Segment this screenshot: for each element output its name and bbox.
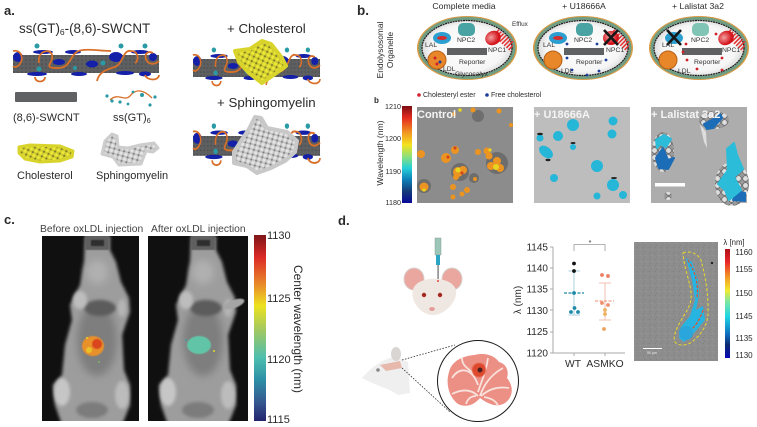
panel a: SWCNT molecular models [4, 3, 320, 182]
label: ss(GT)6: 6 [147, 116, 151, 125]
icon: mouse head with syringe [404, 238, 462, 315]
micrograph: control [417, 107, 513, 203]
organelle: complete media: LAL [425, 42, 437, 49]
colorbar: center wavelength 1115-1130: 1125 [267, 293, 291, 305]
nanotube with cholesterol [193, 41, 320, 86]
cerebellum inset [438, 340, 518, 422]
colorbar: wavelength 1180-1210 [375, 102, 412, 207]
row label: Endolysosomal Organelle [375, 21, 395, 78]
colorbar: lambda 1130-1160: 1155 [735, 265, 753, 274]
colorbar: lambda 1130-1160: 1150 [735, 289, 753, 298]
colorbar: wavelength 1180-1210: 1180 [386, 198, 401, 207]
nanotube with sphingomyelin [193, 117, 320, 173]
hotspot: after [185, 336, 215, 354]
heading: ss(GT)6-(8,6)-SWCNT: -(8,6)-SWCNT [65, 21, 150, 36]
nanotube with DNA wrap [13, 44, 159, 82]
organelle: U18666A [534, 17, 632, 79]
colorbar: wavelength 1180-1210: 1210 [385, 102, 401, 111]
colorbar: center wavelength 1115-1130: 1115 [267, 414, 290, 426]
colorbar: center wavelength 1115-1130: 1120 [267, 354, 291, 366]
axes [553, 247, 625, 353]
organelle: U18666A: NPC2 [574, 37, 592, 44]
organelle: complete media: Reporter [459, 59, 486, 66]
organelle: U18666A: LAL [543, 42, 555, 49]
icon: side view mouse [362, 347, 410, 395]
colorbar: lambda 1130-1160: 1145 [735, 312, 753, 321]
scale bar with label: 50 µm [647, 351, 657, 355]
x labels: WT [565, 359, 582, 370]
data: ASMKO [595, 273, 614, 331]
data: WT [564, 262, 584, 315]
colorbar: lambda 1130-1160: 1130 [735, 351, 753, 360]
colorbar: center wavelength 1115-1130 [254, 230, 305, 426]
organelle: complete media: Glycocalyx [455, 71, 488, 78]
y tick labels: 1130 [526, 306, 548, 317]
legend: cholesterol types: Free cholesterol [491, 92, 542, 99]
micrograph: U18666A [534, 107, 630, 203]
heading: before injection: Before oxLDL injection [40, 224, 143, 235]
panel label c: c. [4, 212, 15, 227]
panel label a: a. [4, 3, 15, 18]
organelle: Lalistat 3a2: LAL [662, 42, 674, 49]
organelle: complete media: NPC1 [488, 47, 506, 54]
row label: Endolysosomal Organelle: Organelle [385, 32, 395, 68]
y tick labels: 1145 [526, 242, 548, 254]
organelle: U18666A: Reporter [576, 59, 603, 66]
y tick labels: 1140 [526, 264, 548, 274]
micrograph: cerebellar lesion [634, 242, 718, 361]
scale bar [655, 183, 685, 186]
x labels [565, 359, 624, 370]
organelle: complete media [418, 17, 529, 79]
colorbar: lambda 1130-1160: 1160 [735, 248, 753, 257]
colorbar: lambda 1130-1160: λ [nm] [723, 238, 745, 247]
panel label b: b. [357, 3, 369, 18]
label: ss(GT)6: ss(GT) [113, 112, 147, 124]
heading: after injection: After oxLDL injection [151, 224, 246, 235]
y tick labels [526, 242, 548, 360]
organelle: Lalistat 3a2 [650, 17, 748, 79]
panel c: in vivo mouse imaging [4, 212, 305, 426]
label: + Lalistat 3a2: + Lalistat 3a2 [651, 109, 720, 121]
sub-label b: b [374, 96, 379, 105]
panel b: endolysosomal organelle schematics and micrographs [357, 1, 749, 207]
cholesterol model [19, 145, 73, 162]
organelle: Lalistat 3a2: NPC1 [722, 47, 740, 54]
organelle: complete media: NPC2 [457, 37, 475, 44]
zoom lines [402, 345, 455, 412]
y tick labels: 1120 [526, 348, 548, 360]
label: Control: Control [417, 109, 456, 121]
mouse image: before [42, 236, 139, 421]
colorbar: wavelength 1180-1210: 1200 [385, 134, 401, 143]
row label: Endolysosomal Organelle: Endolysosomal [375, 21, 385, 78]
heading: Complete media: Complete media [432, 1, 496, 11]
organelle: Lalistat 3a2: Reporter [694, 59, 721, 66]
bare nanotube model [15, 92, 77, 102]
label: (8,6)-SWCNT: (8,6)-SWCNT [13, 112, 80, 124]
chart: wavelength by genotype [513, 240, 625, 370]
ss(GT)6 strand model [105, 91, 157, 107]
colorbar: lambda 1130-1160: 1135 [735, 334, 753, 343]
hotspot: before [82, 336, 104, 363]
sphingomyelin model [102, 134, 158, 165]
colorbar: wavelength 1180-1210: Wavelength (nm) [375, 120, 385, 186]
heading: + Cholesterol: + Cholesterol [227, 21, 306, 36]
heading: ss(GT)6-(8,6)-SWCNT: ss(GT) [19, 21, 60, 36]
label: Sphingomyelin: Sphingomyelin [96, 170, 168, 182]
heading: + U18666A: + U18666A [562, 1, 606, 11]
mouse image: after [148, 236, 248, 421]
colorbar: center wavelength 1115-1130: 1130 [267, 230, 291, 242]
x labels: ASMKO [586, 359, 624, 370]
label: + U18666A: + U18666A [534, 109, 590, 121]
organelle: U18666A: LDL [561, 68, 574, 75]
legend: cholesterol types: Cholesteryl ester [423, 92, 476, 99]
organelle: U18666A: NPC1 [606, 47, 624, 54]
y axis label: λ (nm) [513, 286, 524, 314]
colorbar: center wavelength 1115-1130: Center wavelength (nm) [291, 265, 305, 393]
micrograph: Lalistat 3a2 [651, 107, 749, 206]
heading: + Lalistat 3a2: + Lalistat 3a2 [672, 1, 724, 11]
organelle: Lalistat 3a2: LDL [678, 68, 691, 75]
panel label d: d. [338, 213, 350, 228]
y tick labels: 1135 [526, 284, 548, 296]
legend: cholesterol types [417, 92, 542, 99]
heading: ss(GT)6-(8,6)-SWCNT: 6 [60, 27, 65, 37]
colorbar: wavelength 1180-1210: 1190 [386, 167, 401, 176]
label: Cholesterol: Cholesterol [17, 170, 73, 182]
y tick labels: 1125 [526, 327, 548, 338]
organelle: complete media: Efflux [512, 21, 529, 28]
significance bracket: * [589, 240, 592, 247]
organelle: Lalistat 3a2: NPC2 [691, 37, 709, 44]
heading: + Sphingomyelin: + Sphingomyelin [217, 95, 316, 110]
panel d: brain injection and chart [338, 213, 753, 422]
organelle: complete media: LDL [443, 66, 456, 73]
colorbar: lambda 1130-1160 [723, 238, 753, 360]
